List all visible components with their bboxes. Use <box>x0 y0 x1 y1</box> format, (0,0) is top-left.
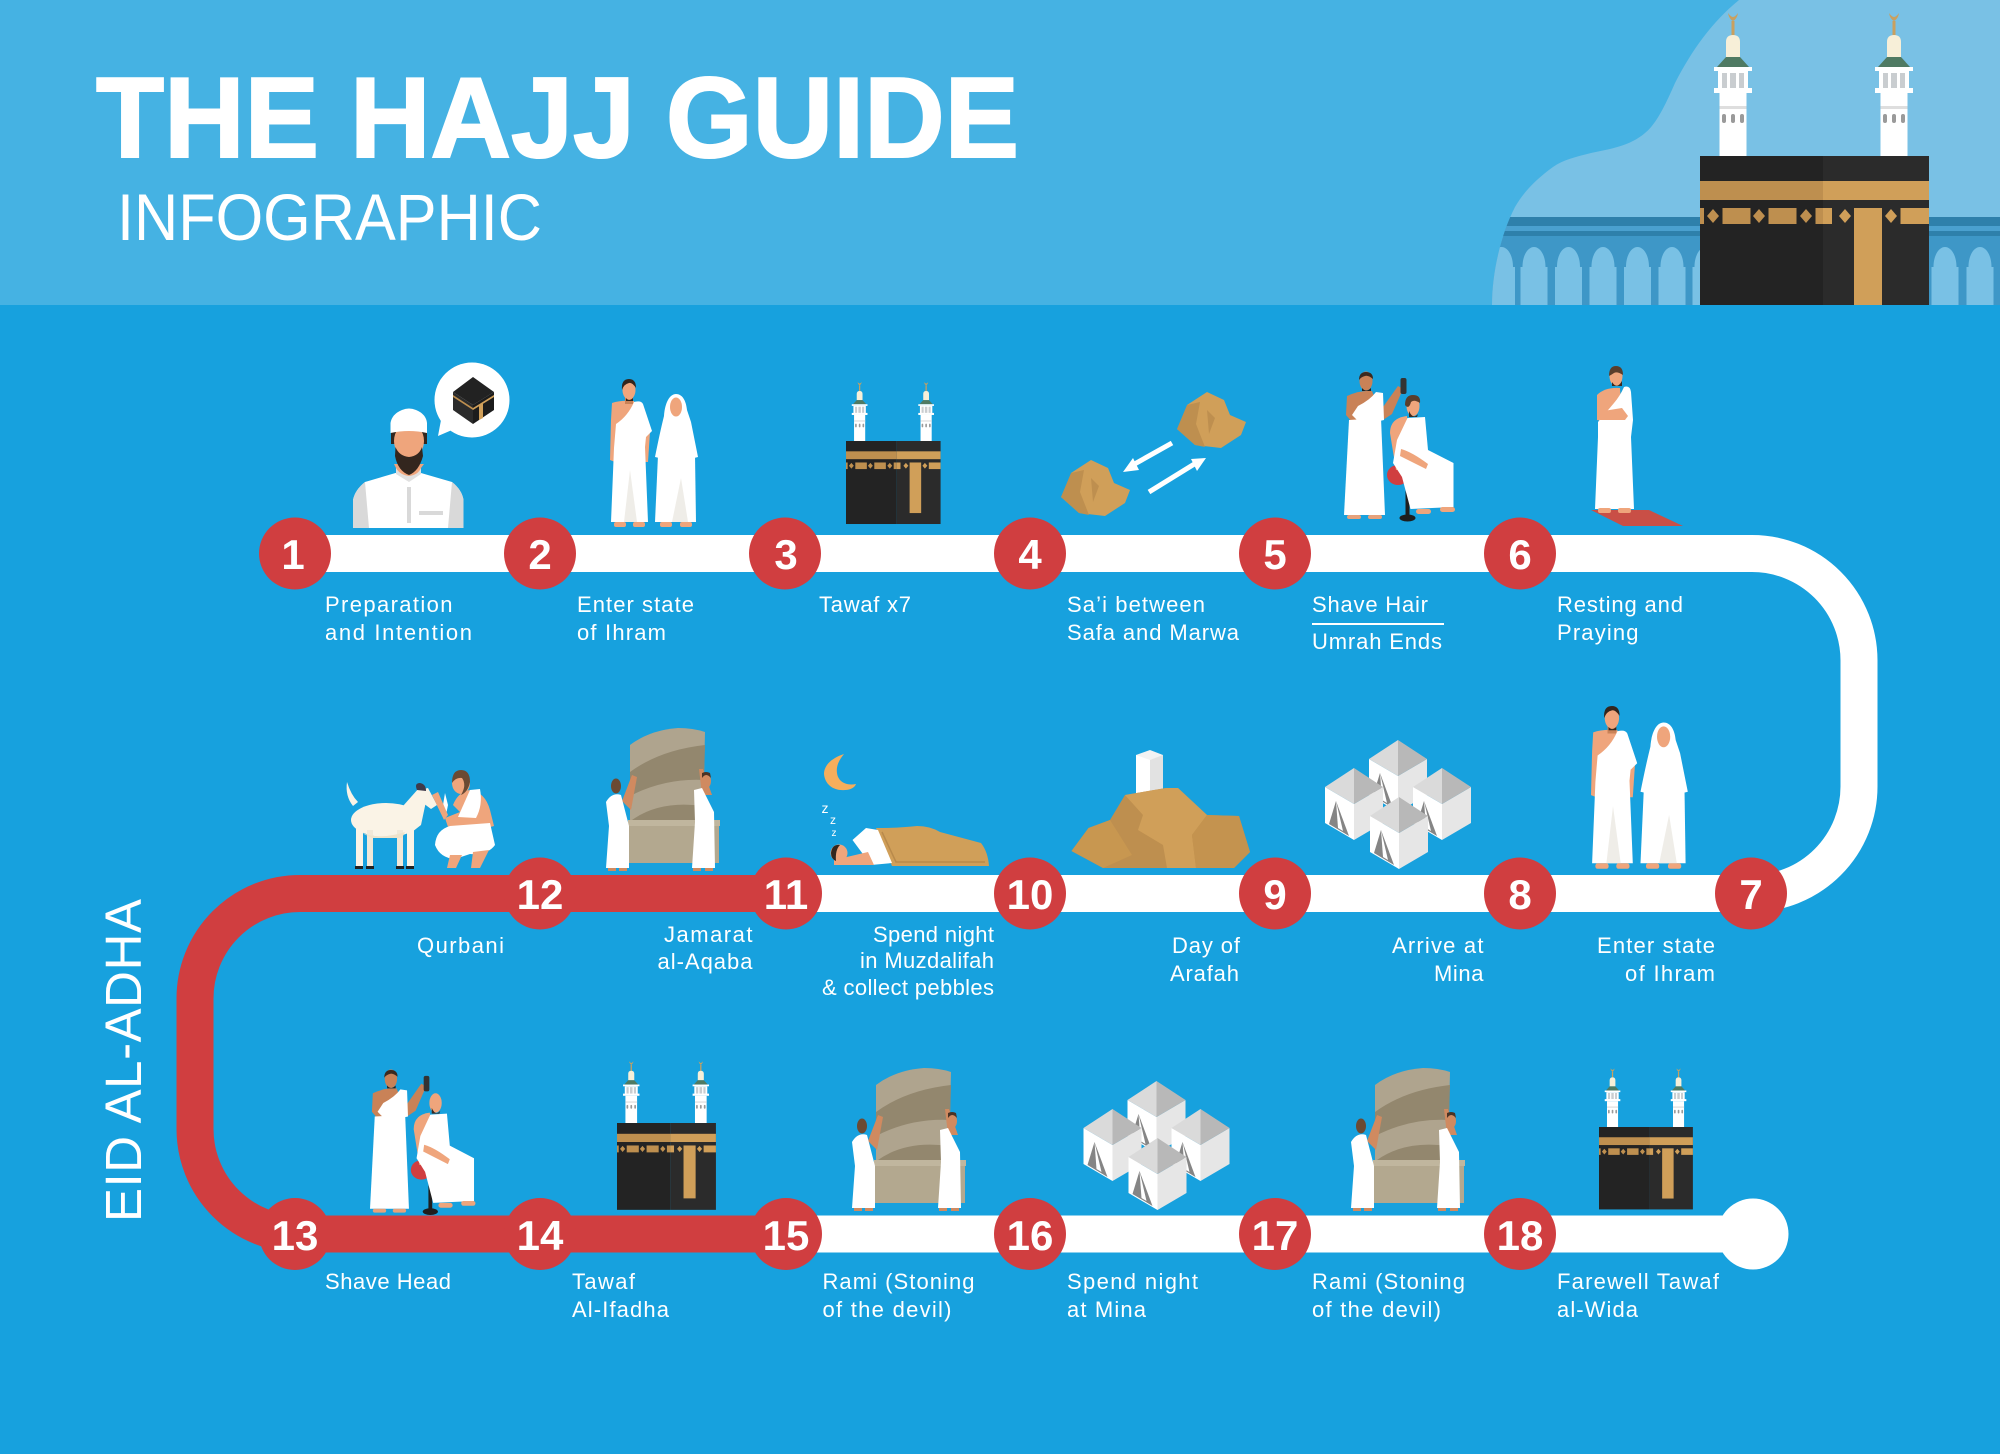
number badge 11 <box>750 858 822 930</box>
route end marker <box>1718 1198 1788 1270</box>
label 17 <box>1312 1269 1465 1322</box>
icon: kaaba <box>617 1061 716 1210</box>
label 1 <box>325 592 472 645</box>
label 10: & collect pebbles <box>822 975 994 1000</box>
step 9 <box>1072 750 1311 986</box>
label 18: Farewell Tawaf <box>1557 1269 1720 1294</box>
label 3: Tawaf x7 <box>819 592 911 617</box>
subtitle: INFOGRAPHIC <box>117 180 542 254</box>
icon: praying man on mat <box>1591 366 1683 526</box>
step 5 <box>1239 372 1455 654</box>
icon: tents at Mina <box>1084 1081 1230 1210</box>
icon: sleeping pilgrim under moon <box>822 754 989 866</box>
label 1: Preparation <box>325 592 452 617</box>
label 17: of the devil) <box>1312 1297 1441 1322</box>
icon: Mount Arafah <box>1072 750 1250 868</box>
step 2 <box>504 379 698 645</box>
label 6: Praying <box>1557 620 1638 645</box>
colonnade <box>1480 217 2000 305</box>
number badge 17: 17 <box>1252 1212 1298 1259</box>
number badge 16 <box>994 1198 1066 1270</box>
icon: Jamarat pillar <box>852 1068 966 1211</box>
label 18: al-Wida <box>1557 1297 1639 1322</box>
number badge 11: 11 <box>764 871 808 918</box>
icon: kaaba <box>1599 1068 1693 1209</box>
step 3 <box>749 382 941 617</box>
number badge 4: 4 <box>1018 531 1042 578</box>
side heading: Eid al-Adha: EID AL-ADHA <box>95 899 152 1222</box>
label 9: Arafah <box>1170 961 1239 986</box>
step 11 <box>606 728 822 974</box>
icon: goat and man <box>347 770 495 869</box>
label 9: Day of <box>1172 933 1241 958</box>
icon: sleeping pilgrim under moon: z <box>830 813 836 827</box>
label 6: Resting and <box>1557 592 1683 617</box>
number badge 6 <box>1484 518 1556 590</box>
label 11: Jamarat <box>664 922 752 947</box>
icon: sleeping pilgrim under moon: z <box>822 800 828 816</box>
label 7: Enter state <box>1597 933 1715 958</box>
number badge 1 <box>259 518 331 590</box>
label 11 <box>658 922 753 974</box>
icon: Jamarat pillar <box>1351 1068 1465 1211</box>
label 15: Rami (Stoning <box>822 1269 974 1294</box>
route: white path row three <box>786 1216 1753 1252</box>
number badge 10: 10 <box>1007 871 1053 918</box>
label 15 <box>822 1269 974 1322</box>
header wave backdrop <box>1492 0 2000 305</box>
number badge 3: 3 <box>774 531 798 578</box>
number badge 2: 2 <box>528 531 552 578</box>
route: white path rows one and two <box>295 554 1859 894</box>
number badge 13: 13 <box>272 1212 318 1259</box>
step 10 <box>822 754 1066 1000</box>
step 18 <box>1484 1068 1720 1322</box>
number badge 12 <box>504 858 576 930</box>
label 11: al-Aqaba <box>658 949 753 974</box>
label 15: of the devil) <box>822 1297 952 1322</box>
number badge 12: 12 <box>517 871 563 918</box>
number badge 17 <box>1239 1198 1311 1270</box>
label 1: and Intention <box>325 620 472 645</box>
label 4 <box>1067 592 1240 645</box>
label 5 <box>1312 592 1444 654</box>
number badge 7: 7 <box>1739 871 1763 918</box>
number badge 6: 6 <box>1508 531 1532 578</box>
label 16: at Mina <box>1067 1297 1147 1322</box>
step 6 <box>1484 366 1683 645</box>
label 5: Shave Hair <box>1312 592 1428 617</box>
label 6 <box>1557 592 1683 645</box>
number badge 13 <box>259 1198 331 1270</box>
number badge 7 <box>1715 858 1787 930</box>
label 14: Al-Ifadha <box>572 1297 670 1322</box>
number badge 8: 8 <box>1508 871 1532 918</box>
number badge 9: 9 <box>1263 871 1287 918</box>
number badge 5 <box>1239 518 1311 590</box>
number badge 8 <box>1484 858 1556 930</box>
number badge 10 <box>994 858 1066 930</box>
label 4: Safa and Marwa <box>1067 620 1240 645</box>
header panel <box>0 0 2000 357</box>
number badge 4 <box>994 518 1066 590</box>
icon: sleeping pilgrim under moon: z <box>832 828 836 839</box>
number badge 14: 14 <box>517 1212 564 1259</box>
step 17 <box>1239 1068 1465 1322</box>
label 7 <box>1597 933 1715 986</box>
number badge 14 <box>504 1198 576 1270</box>
label 12: Qurbani <box>417 933 504 958</box>
number badge 3 <box>749 518 821 590</box>
label 10 <box>822 922 994 1000</box>
label 2: Enter state <box>577 592 694 617</box>
label 14: Tawaf <box>572 1269 636 1294</box>
icon: pilgrims in ihram <box>610 379 698 527</box>
icon: shaving head <box>370 1070 475 1215</box>
step 14 <box>504 1061 716 1322</box>
step 16 <box>994 1081 1230 1322</box>
icon: Safa and Marwa rocks <box>1061 392 1246 516</box>
number badge 1: 1 <box>281 531 305 578</box>
icon: kaaba <box>846 382 941 524</box>
number badge 18: 18 <box>1497 1212 1543 1259</box>
step 7 <box>1591 706 1787 986</box>
label 4: Sa’i between <box>1067 592 1205 617</box>
title: THE HAJJ GUIDE <box>96 55 1019 182</box>
label 8: Arrive at <box>1392 933 1484 958</box>
label 16: Spend night <box>1067 1269 1198 1294</box>
label 14 <box>572 1269 670 1322</box>
number badge 15: 15 <box>763 1212 809 1259</box>
step 12 <box>347 770 576 958</box>
icon: man with speech bubble <box>353 362 510 528</box>
number badge 2 <box>504 518 576 590</box>
icon: Jamarat pillar <box>606 728 720 871</box>
number badge 18 <box>1484 1198 1556 1270</box>
label 10: in Muzdalifah <box>860 948 994 973</box>
step 15 <box>750 1068 974 1322</box>
number badge 9 <box>1239 858 1311 930</box>
number badge 15 <box>750 1198 822 1270</box>
label 8: Mina <box>1434 961 1484 986</box>
label 16 <box>1067 1269 1198 1322</box>
label 17: Rami (Stoning <box>1312 1269 1465 1294</box>
step 13 <box>259 1070 475 1294</box>
label 7: of Ihram <box>1625 961 1715 986</box>
number badge 5: 5 <box>1263 531 1287 578</box>
label 9 <box>1170 933 1241 986</box>
step 4 <box>994 392 1246 645</box>
number badge 16: 16 <box>1007 1212 1053 1259</box>
icon: tents at Mina <box>1325 740 1471 869</box>
label 10: Spend night <box>873 922 994 947</box>
step 1 <box>259 362 510 645</box>
route: red Eid al-Adha section <box>195 894 786 1234</box>
header kaaba and minarets <box>1700 13 1929 357</box>
label 2 <box>577 592 694 645</box>
label 18 <box>1557 1269 1720 1322</box>
label 8 <box>1392 933 1484 986</box>
body panel <box>0 305 2000 1454</box>
label 2: of Ihram <box>577 620 666 645</box>
label 5: Umrah Ends <box>1312 629 1442 654</box>
label 13: Shave Head <box>325 1269 451 1294</box>
icon: shaving hair <box>1344 372 1455 522</box>
icon: pilgrims in ihram <box>1591 706 1688 869</box>
step 8 <box>1325 740 1556 986</box>
